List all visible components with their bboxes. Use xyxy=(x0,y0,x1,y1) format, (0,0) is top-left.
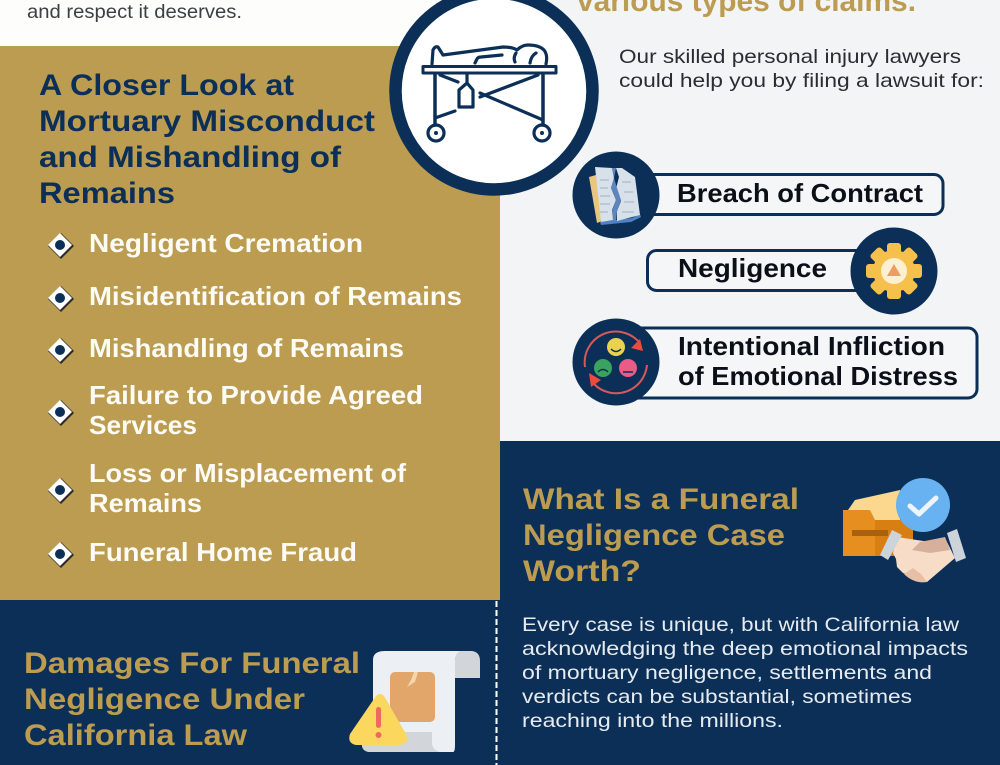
heading: what is a funeral negligence case worth: Worth? xyxy=(523,555,641,588)
text: lawyers intro xyxy=(619,46,984,92)
list item: loss or misplacement xyxy=(48,458,406,518)
claim: negligence xyxy=(648,228,938,314)
text: lawyers intro: Our skilled personal injury lawyers xyxy=(619,46,961,68)
heading: closer look: Remains xyxy=(39,177,175,210)
heading: damages: California Law xyxy=(24,719,248,752)
text: case worth body xyxy=(522,614,968,732)
panel: intro background xyxy=(0,0,500,46)
heading: closer look: A Closer Look at xyxy=(39,69,294,102)
claim: breach of contract: Breach of Contract xyxy=(677,178,923,208)
list item: loss or misplacement: Loss or Misplacement of xyxy=(89,458,406,488)
panel: claims background xyxy=(500,0,1000,441)
text: case worth body: Every case is unique, but with California law xyxy=(522,614,960,636)
heading: closer look xyxy=(39,69,375,210)
claim: negligence: Negligence xyxy=(678,253,827,283)
intro text: and respect it deserves. xyxy=(27,1,242,23)
heading: what is a funeral negligence case worth: What Is a Funeral xyxy=(523,483,799,516)
text: case worth body: reaching into the millions. xyxy=(522,710,783,732)
heading: closer look: Mortuary Misconduct xyxy=(39,105,375,138)
panel: damages xyxy=(0,600,500,765)
claim: intentional infliction of emotional distress xyxy=(572,318,977,406)
heading: closer look: and Mishandling of xyxy=(39,141,342,174)
list item: failure to provide services: Failure to Provide Agreed xyxy=(89,380,423,410)
heading: what is a funeral negligence case worth: Negligence Case xyxy=(523,519,785,552)
claim: intentional infliction of emotional distress: of Emotional Distress xyxy=(678,361,958,391)
icon: gear with warning xyxy=(866,243,922,299)
panel: funeral negligence case worth xyxy=(500,441,1000,765)
list item: failure to provide services: Services xyxy=(89,410,197,440)
icon: torn contract xyxy=(589,167,641,225)
icon: emotion faces cycle xyxy=(585,332,647,393)
heading: what is a funeral negligence case worth xyxy=(523,483,799,588)
heading: damages: Damages For Funeral xyxy=(24,647,360,680)
icon: folder and handshake xyxy=(843,478,966,582)
claim: intentional infliction of emotional distress: Intentional Infliction xyxy=(678,331,945,361)
list item: failure to provide services xyxy=(48,380,423,440)
heading: damages: Negligence Under xyxy=(24,683,305,716)
list item: funeral home fraud: Funeral Home Fraud xyxy=(89,537,357,567)
icon: scroll with warning xyxy=(349,651,480,752)
panel: mortuary misconduct xyxy=(0,46,500,600)
icon: body on gurney xyxy=(396,0,592,190)
list item: mishandling: Mishandling of Remains xyxy=(89,333,404,363)
list item: misidentification: Misidentification of Remains xyxy=(89,281,462,311)
list item: negligent cremation: Negligent Cremation xyxy=(89,228,363,258)
text: case worth body: of mortuary negligence, settlements and xyxy=(522,662,932,684)
text: case worth body: acknowledging the deep emotional impacts xyxy=(522,638,968,660)
text: case worth body: verdicts can be substantial, sometimes xyxy=(522,686,912,708)
text: lawyers intro: could help you by filing a lawsuit for: xyxy=(619,70,984,92)
heading: damages xyxy=(24,647,360,752)
list item: loss or misplacement: Remains xyxy=(89,488,202,518)
claim: breach of contract xyxy=(572,152,943,238)
